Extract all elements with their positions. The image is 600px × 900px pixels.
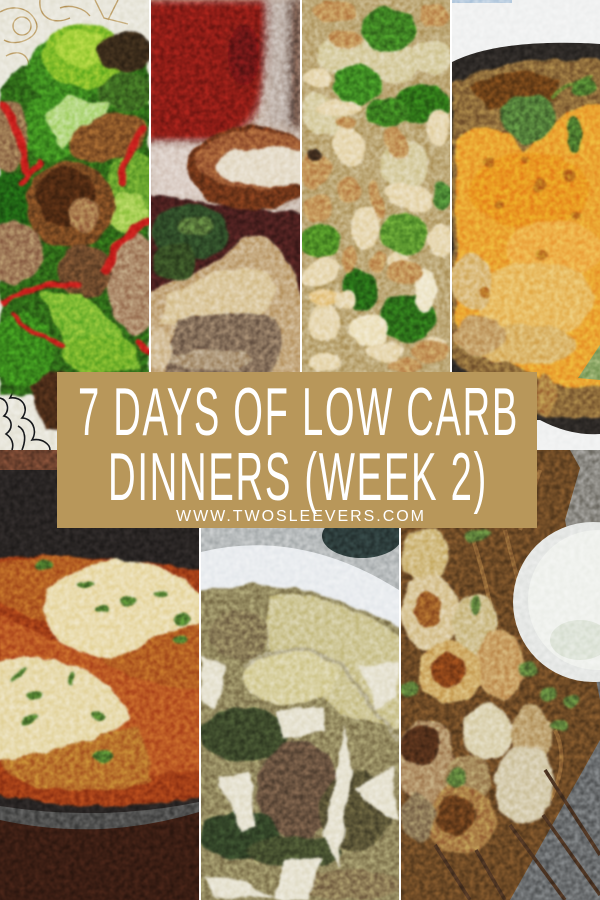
sausage: right slice: [106, 232, 149, 338]
melted cheese: [452, 105, 600, 388]
spoon bowl: [244, 649, 399, 740]
melted mozzarella bottom: [0, 658, 130, 760]
black lace plate pattern: [0, 376, 50, 450]
panel: almond broccoli chicken: [296, 0, 452, 372]
gold lace plate pattern: [0, 0, 128, 72]
broccoli clusters: [300, 8, 452, 342]
breaded cutlet: [0, 557, 204, 791]
soup broth: [196, 585, 404, 900]
dip bowl: [513, 522, 600, 682]
title panel: [57, 372, 537, 528]
green base under food: [0, 50, 149, 395]
oregano leaves: [400, 529, 579, 789]
plate shadow and sausage under the food: [28, 372, 70, 430]
website url: WWW.TWOSLEEVERS.COM: [176, 508, 424, 525]
almond flakes: toasted: [300, 2, 451, 371]
panel: cheesy skillet: [452, 0, 600, 450]
charred almond: [308, 149, 322, 161]
sausage: left slice: [0, 221, 43, 283]
sausage: top right: [98, 32, 154, 72]
pan: [0, 470, 199, 825]
melted mozzarella top: [45, 559, 204, 658]
panel: chicken skewers with tzatziki: [395, 450, 600, 900]
panel: zuppa toscana soup: [196, 514, 404, 900]
sausage: upper slice: [68, 111, 148, 164]
broccoli: top floret: [26, 24, 126, 104]
skillet rim: [452, 43, 600, 434]
skewers: [435, 770, 600, 900]
pale table: [151, 145, 300, 200]
almond flakes: pale: [296, 68, 452, 370]
dark wood board: [151, 193, 300, 298]
stuffed pork: [151, 234, 300, 372]
broccoli: bottom floret: [0, 292, 142, 386]
red pepper strips: [2, 104, 149, 352]
kale garnish: [152, 204, 228, 282]
sausage: centre round: [26, 161, 114, 249]
sausage: lower slice: [58, 246, 114, 298]
refried base: [452, 59, 600, 418]
panel: broccoli and sausage plate: [0, 0, 159, 450]
kale and sausage: [200, 610, 400, 900]
avocado slice: [578, 345, 600, 380]
panel: pork with crema: [151, 0, 300, 372]
dark kale background: [322, 514, 402, 558]
chicken pieces: [395, 529, 553, 854]
tomato sauce: [0, 557, 204, 806]
background wall: [268, 0, 290, 125]
terracotta bowl: [188, 126, 320, 210]
browned spots: [480, 156, 580, 298]
white bowl: [201, 545, 399, 900]
parmesan shards: [201, 655, 399, 900]
pale rice and chicken base: [303, 35, 452, 190]
sausage: far left: [0, 100, 26, 172]
panel: chicken parmesan skillet: [0, 450, 204, 900]
broccoli: middle floret: [22, 94, 108, 162]
edge crust: [535, 375, 557, 415]
broccoli: left dark: [0, 173, 32, 226]
cilantro garnish: [500, 78, 599, 153]
red clay pot: [145, 0, 268, 142]
wooden post: [289, 0, 301, 128]
broccoli: right greens: [97, 72, 149, 234]
wooden board: [401, 450, 600, 900]
basil flecks: [10, 560, 190, 762]
